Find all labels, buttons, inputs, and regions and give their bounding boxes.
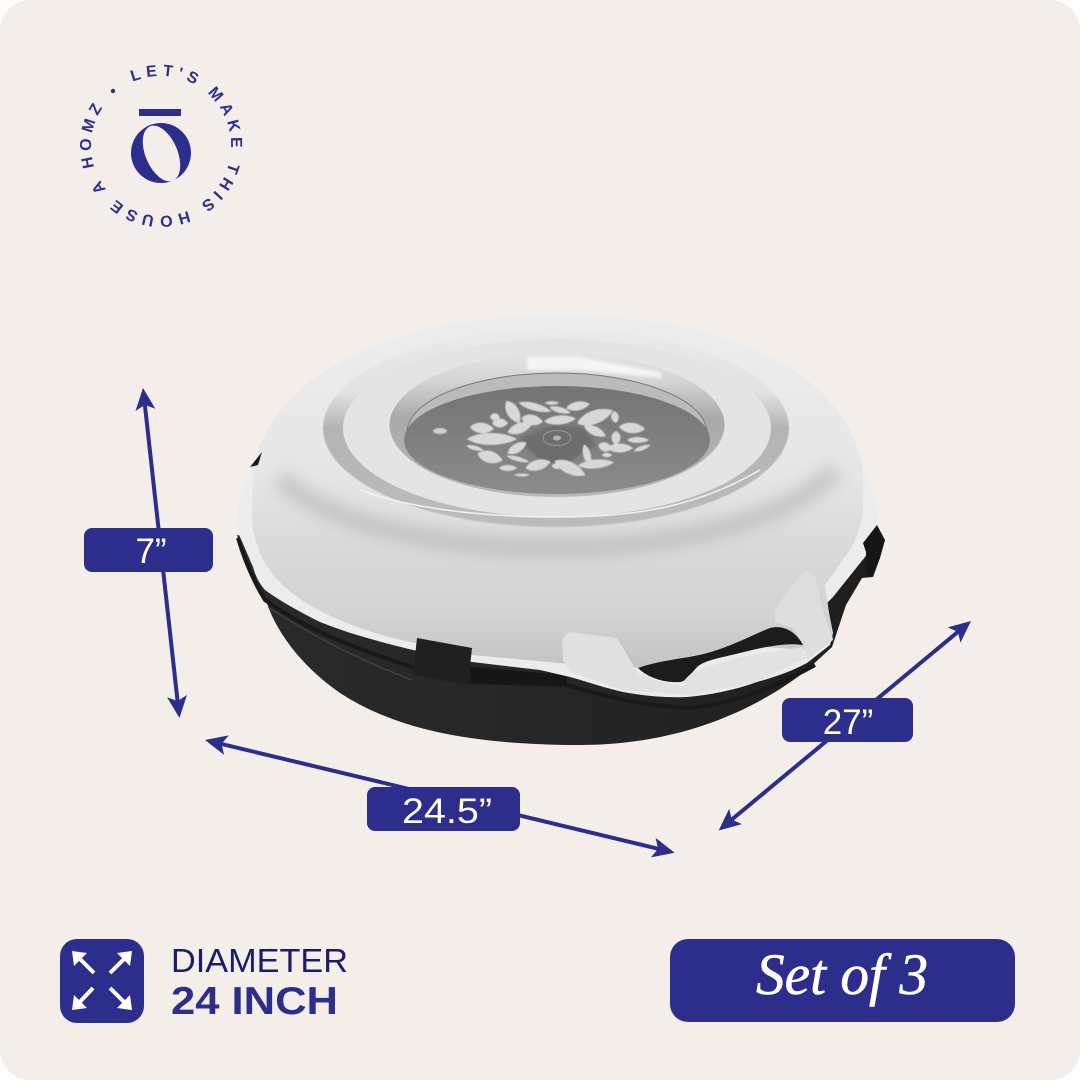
window glass rim <box>390 353 724 497</box>
lid shoulder shadow <box>280 470 835 548</box>
lid outer window ring <box>323 329 789 527</box>
left upper clip <box>250 452 262 467</box>
width value: 24.5” <box>402 792 492 831</box>
depth value: 27” <box>823 703 873 742</box>
circular slogan: LET'S MAKE THIS HOUSE A HOMZ <box>80 64 242 227</box>
ring highlight line <box>360 470 760 517</box>
badge text: Set of 3 <box>756 942 928 1007</box>
left handle tab <box>562 632 690 695</box>
window upper band <box>407 373 707 493</box>
height label <box>84 528 213 572</box>
right handle tab <box>775 570 833 660</box>
set of 3 badge <box>670 939 1015 1022</box>
lid body <box>252 455 863 668</box>
front latch <box>413 638 472 685</box>
depth label <box>782 698 913 742</box>
diameter label: DIAMETER <box>171 942 348 979</box>
icon: expand arrows <box>60 939 144 1023</box>
right latch <box>863 525 885 577</box>
lid flange <box>237 315 878 697</box>
dark window <box>404 386 710 494</box>
window glare <box>527 357 662 378</box>
base groove line <box>268 607 412 680</box>
badge background <box>670 939 1015 1022</box>
wreath centre hub <box>543 430 571 446</box>
width arrow line <box>203 730 677 862</box>
wreath decoration <box>433 398 651 481</box>
wreath centre shadow <box>520 425 597 465</box>
height arrow line <box>133 387 189 719</box>
dimension arrow: width 24.5 inch <box>203 730 677 862</box>
handle opening <box>638 627 803 682</box>
black rim strip <box>470 667 567 685</box>
slogan dot <box>111 89 115 93</box>
width label <box>367 787 520 831</box>
dimension arrow: height 7 inch <box>84 387 213 719</box>
logo ring letter <box>131 120 191 187</box>
dimension arrow: depth 27 inch <box>712 613 977 838</box>
base rim band <box>238 538 815 708</box>
brand logo <box>80 64 242 227</box>
container base <box>237 530 880 745</box>
height value: 7” <box>135 532 167 571</box>
handle bar <box>683 647 805 695</box>
depth arrow line <box>712 613 977 838</box>
diameter value: 24 INCH <box>171 980 338 1023</box>
logo bar <box>139 109 181 116</box>
lid light ring <box>343 339 771 517</box>
product: wreath storage container <box>237 310 887 745</box>
diameter feature <box>60 939 348 1023</box>
